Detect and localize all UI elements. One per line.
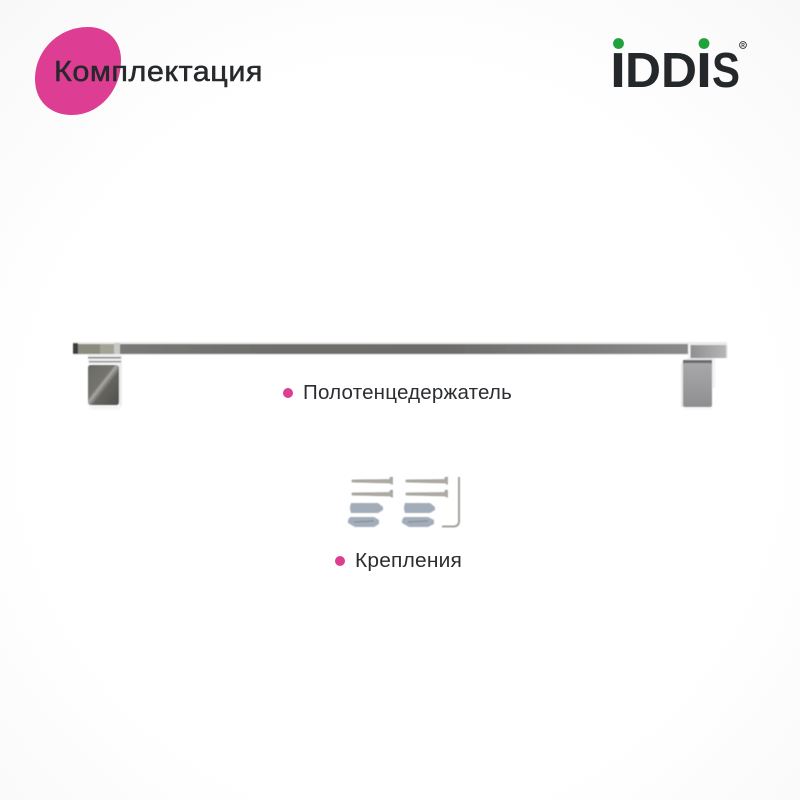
hex key <box>442 477 459 526</box>
logo letters: S <box>712 44 740 98</box>
logo letters: I <box>696 44 712 98</box>
wall plugs <box>348 503 435 527</box>
logo letters: D <box>625 44 661 98</box>
logo letters: I <box>610 44 626 98</box>
logo letters: D <box>661 44 697 98</box>
logo letters <box>610 44 740 98</box>
pink bullet <box>335 556 345 566</box>
pink blob <box>35 27 121 115</box>
heading text: Комплектация <box>54 56 263 88</box>
towel holder <box>73 342 728 409</box>
screws <box>352 477 448 498</box>
registered mark: R <box>741 43 745 49</box>
logo: IDDIS <box>610 38 746 98</box>
logo green dots <box>613 38 709 49</box>
plug slots <box>354 521 428 522</box>
left wall bracket <box>88 354 122 409</box>
pink bullet <box>283 388 293 398</box>
mounting hardware <box>348 477 459 527</box>
label: fasteners <box>335 550 462 572</box>
label text: Крепления <box>355 550 462 572</box>
label text: Полотенцедержатель <box>303 382 512 404</box>
heading: Комплектация with pink blob <box>35 27 263 115</box>
label: towel holder <box>283 382 512 404</box>
horizontal bar <box>73 342 728 358</box>
right wall bracket <box>681 356 715 409</box>
